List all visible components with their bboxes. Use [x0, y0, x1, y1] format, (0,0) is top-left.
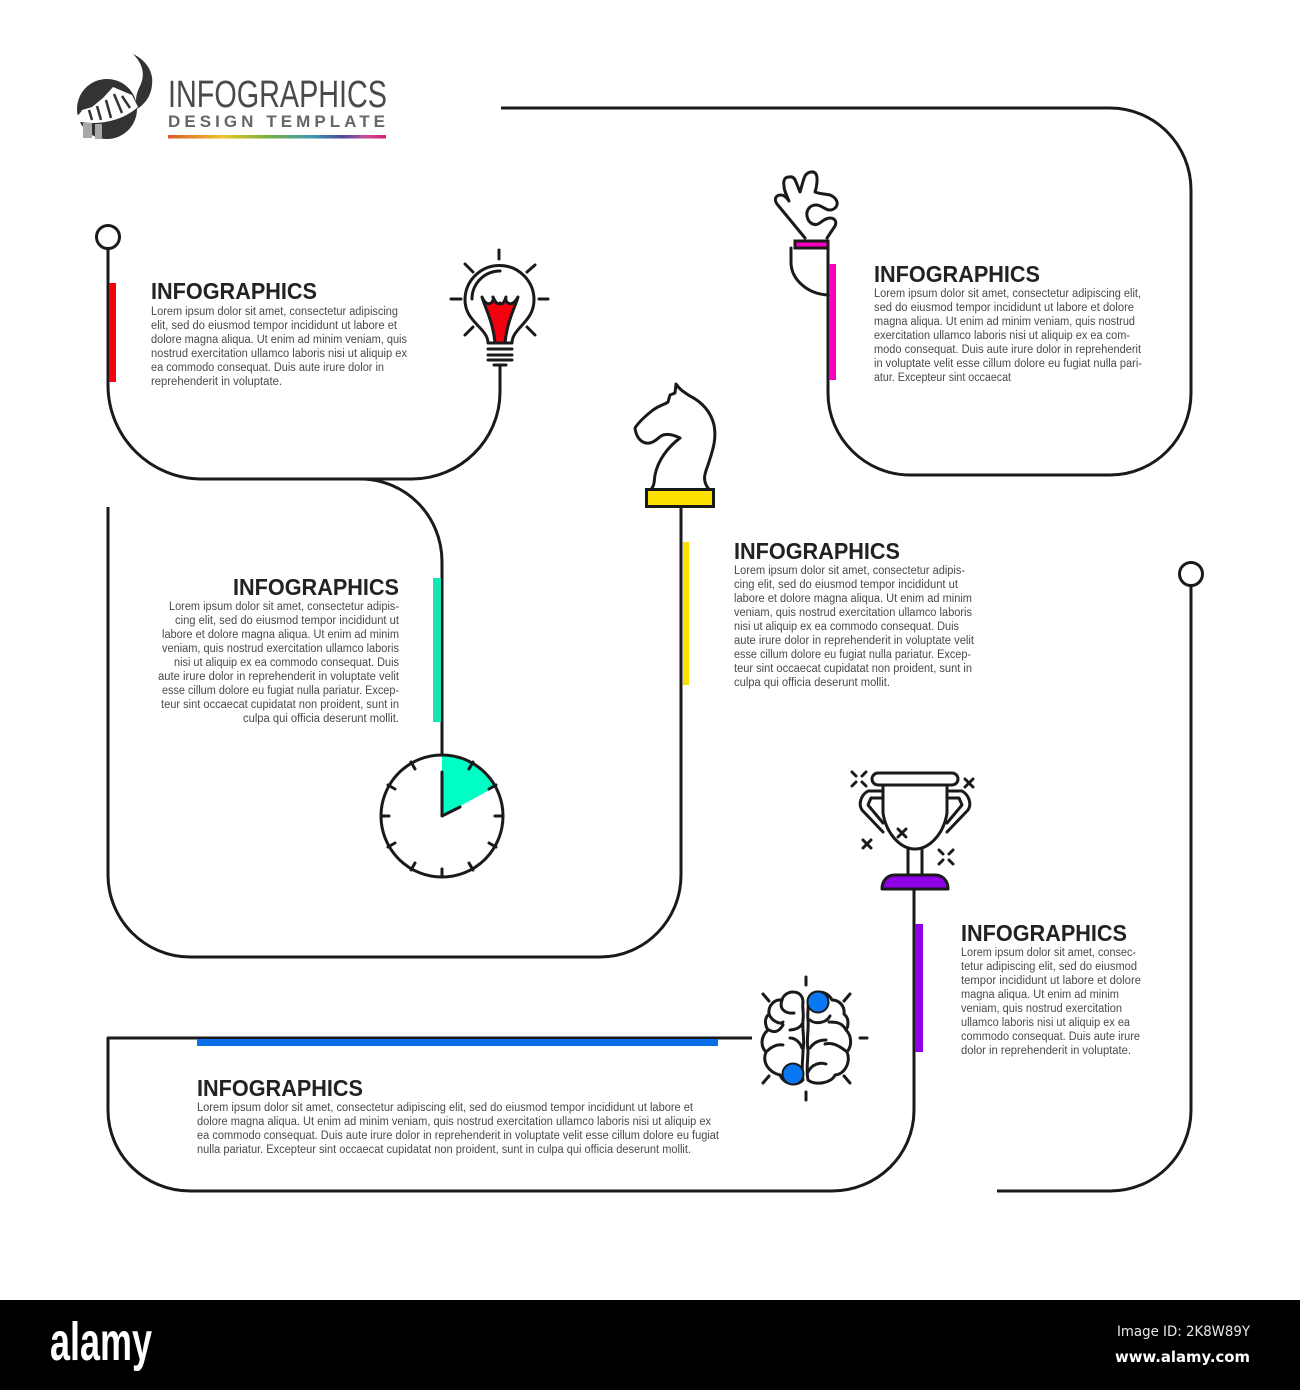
panel: step 2 text: sed do eiusmod tempor incididunt ut labore et dolore: [874, 302, 1134, 314]
icon: chess knight: [635, 384, 715, 506]
panel: step 5 text: tempor incididunt ut labore et dolore: [961, 975, 1141, 987]
panel: step 4 text: INFOGRAPHICS: [233, 574, 399, 600]
panel: step 6 text: [197, 1075, 720, 1156]
panel: step 5 text: tetur adipiscing elit, sed do eiusmod: [961, 961, 1137, 973]
panel: step 1 text: ea commodo consequat. Duis aute irure dolor in: [151, 362, 384, 374]
panel: step 2 text: atur. Excepteur sint occaecat: [874, 372, 1012, 384]
panel: step 6 text: INFOGRAPHICS: [197, 1075, 363, 1101]
panel: step 4 text: aute irure dolor in reprehenderit in voluptate velit: [158, 671, 400, 683]
panel: step 5 text: magna aliqua. Ut enim ad minim: [961, 989, 1119, 1001]
panel: step 3 text: veniam, quis nostrud exercitation ullamco laboris: [734, 607, 972, 619]
panel: step 1 text: [151, 278, 407, 388]
accent bar magenta: [829, 264, 836, 380]
panel: step 2 text: [874, 261, 1142, 384]
accent bar purple: [915, 924, 923, 1052]
panel: step 4 text: nisi ut aliquip ex ea commodo consequat. Duis: [174, 657, 399, 669]
accent bar yellow: [683, 542, 689, 685]
logo emblem: [68, 54, 152, 139]
panel: step 1 text: Lorem ipsum dolor sit amet, consectetur adipiscing: [151, 306, 398, 318]
panel: step 3 text: labore et dolore magna aliqua. Ut enim ad minim: [734, 593, 972, 605]
panel: step 3 text: [734, 538, 975, 689]
panel: step 1 text: nostrud exercitation ullamco laboris nisi ut aliquip ex: [151, 348, 407, 360]
icon: OK hand: [775, 172, 837, 295]
panel: step 5 text: [961, 920, 1141, 1057]
panel: step 3 text: culpa qui officia deserunt mollit.: [734, 677, 890, 689]
logo title: DESIGN TEMPLATE: [168, 112, 385, 131]
panel: step 5 text: ullamco laboris nisi ut aliquip ex ea: [961, 1017, 1131, 1029]
panel: step 1 text: INFOGRAPHICS: [151, 278, 317, 304]
panel: step 4 text: teur sint occaecat cupidatat non proident, sunt in: [161, 699, 399, 711]
panel: step 5 text: veniam, quis nostrud exercitation: [961, 1003, 1122, 1015]
end node right: [1180, 562, 1202, 586]
footer watermark bar: Image ID: 2K8W89Y: [1117, 1324, 1250, 1340]
panel: step 4 text: labore et dolore magna aliqua. Ut enim ad minim: [162, 629, 399, 641]
panel: step 4 text: veniam, quis nostrud exercitation ullamco laboris: [162, 643, 399, 655]
panel: step 3 text: cing elit, sed do eiusmod tempor incididunt ut: [734, 579, 959, 591]
connector lines: [108, 108, 1191, 1191]
logo title: INFOGRAPHICS: [168, 74, 387, 116]
panel: step 5 text: Lorem ipsum dolor sit amet, consec-: [961, 947, 1136, 959]
panel: step 6 text: dolore magna aliqua. Ut enim ad minim veniam, quis nostrud exercitation ullamco laboris nisi ut aliquip ex: [197, 1116, 711, 1128]
panel: step 3 text: Lorem ipsum dolor sit amet, consectetur adipis-: [734, 565, 965, 577]
panel: step 2 text: magna aliqua. Ut enim ad minim veniam, quis nostrud: [874, 316, 1135, 328]
accent bar red: [109, 283, 116, 382]
panel: step 4 text: cing elit, sed do eiusmod tempor incididunt ut: [175, 615, 400, 627]
accent bar teal: [433, 578, 441, 722]
panel: step 5 text: INFOGRAPHICS: [961, 920, 1127, 946]
footer watermark bar: alamy: [50, 1312, 152, 1372]
panel: step 4 text: esse cillum dolore eu fugiat nulla pariatur. Excep-: [162, 685, 399, 697]
icon: trophy: [852, 772, 973, 889]
panel: step 4 text: Lorem ipsum dolor sit amet, consectetur adipis-: [169, 601, 399, 613]
panel: step 3 text: teur sint occaecat cupidatat non proident, sunt in: [734, 663, 972, 675]
panel: step 1 text: reprehenderit in voluptate.: [151, 376, 282, 388]
start node left: [96, 226, 120, 248]
panel: step 6 text: Lorem ipsum dolor sit amet, consectetur adipiscing elit, sed do eiusmod tempor incididunt ut labore et: [197, 1102, 694, 1114]
panel: step 6 text: ea commodo consequat. Duis aute irure dolor in reprehenderit in voluptate velit esse cillum dolore eu fugiat: [197, 1130, 720, 1142]
panel: step 5 text: dolor in reprehenderit in voluptate.: [961, 1045, 1131, 1057]
panel: step 2 text: Lorem ipsum dolor sit amet, consectetur adipiscing elit,: [874, 288, 1141, 300]
panel: step 3 text: esse cillum dolore eu fugiat nulla pariatur. Excep-: [734, 649, 971, 661]
icon: brain: [762, 977, 867, 1100]
panel: step 1 text: dolore magna aliqua. Ut enim ad minim veniam, quis: [151, 334, 407, 346]
icon: light bulb: [451, 250, 548, 365]
panel: step 2 text: exercitation ullamco laboris nisi ut aliquip ex ea com-: [874, 330, 1130, 342]
icon: clock: [381, 755, 503, 877]
panel: step 2 text: modo consequat. Duis aute irure dolor in reprehenderit: [874, 344, 1142, 356]
panel: step 1 text: elit, sed do eiusmod tempor incididunt ut labore et: [151, 320, 398, 332]
panel: step 2 text: INFOGRAPHICS: [874, 261, 1040, 287]
logo title: [168, 74, 387, 138]
panel: step 4 text: culpa qui officia deserunt mollit.: [243, 713, 399, 725]
panel: step 2 text: in voluptate velit esse cillum dolore eu fugiat nulla pari-: [874, 358, 1142, 370]
panel: step 3 text: INFOGRAPHICS: [734, 538, 900, 564]
panel: step 4 text: [158, 574, 400, 725]
footer watermark bar: [0, 1300, 1300, 1390]
panel: step 3 text: aute irure dolor in reprehenderit in voluptate velit: [734, 635, 975, 647]
panel: step 6 text: nulla pariatur. Excepteur sint occaecat cupidatat non proident, sunt in culpa qui officia deserunt mollit.: [197, 1144, 691, 1156]
footer watermark bar: www.alamy.com: [1115, 1348, 1250, 1366]
accent bar blue: [197, 1039, 718, 1046]
panel: step 5 text: commodo consequat. Duis aute irure: [961, 1031, 1140, 1043]
panel: step 3 text: nisi ut aliquip ex ea commodo consequat. Duis: [734, 621, 959, 633]
